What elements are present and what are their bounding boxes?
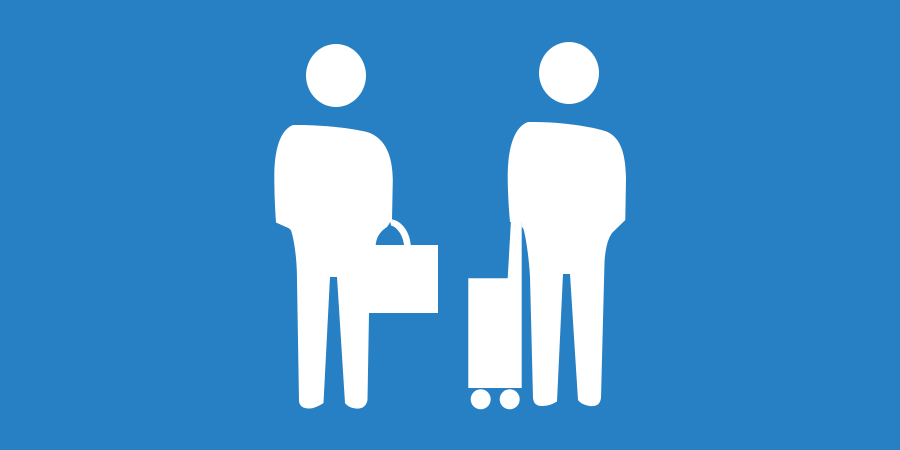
left figure body [274, 125, 393, 409]
left figure head [306, 44, 366, 107]
right figure head [539, 42, 599, 104]
right figure body [508, 122, 626, 406]
icon: suitcase [468, 220, 522, 409]
briefcase handle [390, 219, 411, 245]
right wheel [500, 389, 520, 409]
suitcase handle and case [468, 220, 522, 388]
left figure with briefcase [274, 44, 438, 409]
left wheel [471, 389, 491, 409]
right figure with suitcase [468, 42, 626, 409]
icon: briefcase [368, 219, 438, 313]
briefcase case [368, 245, 438, 313]
